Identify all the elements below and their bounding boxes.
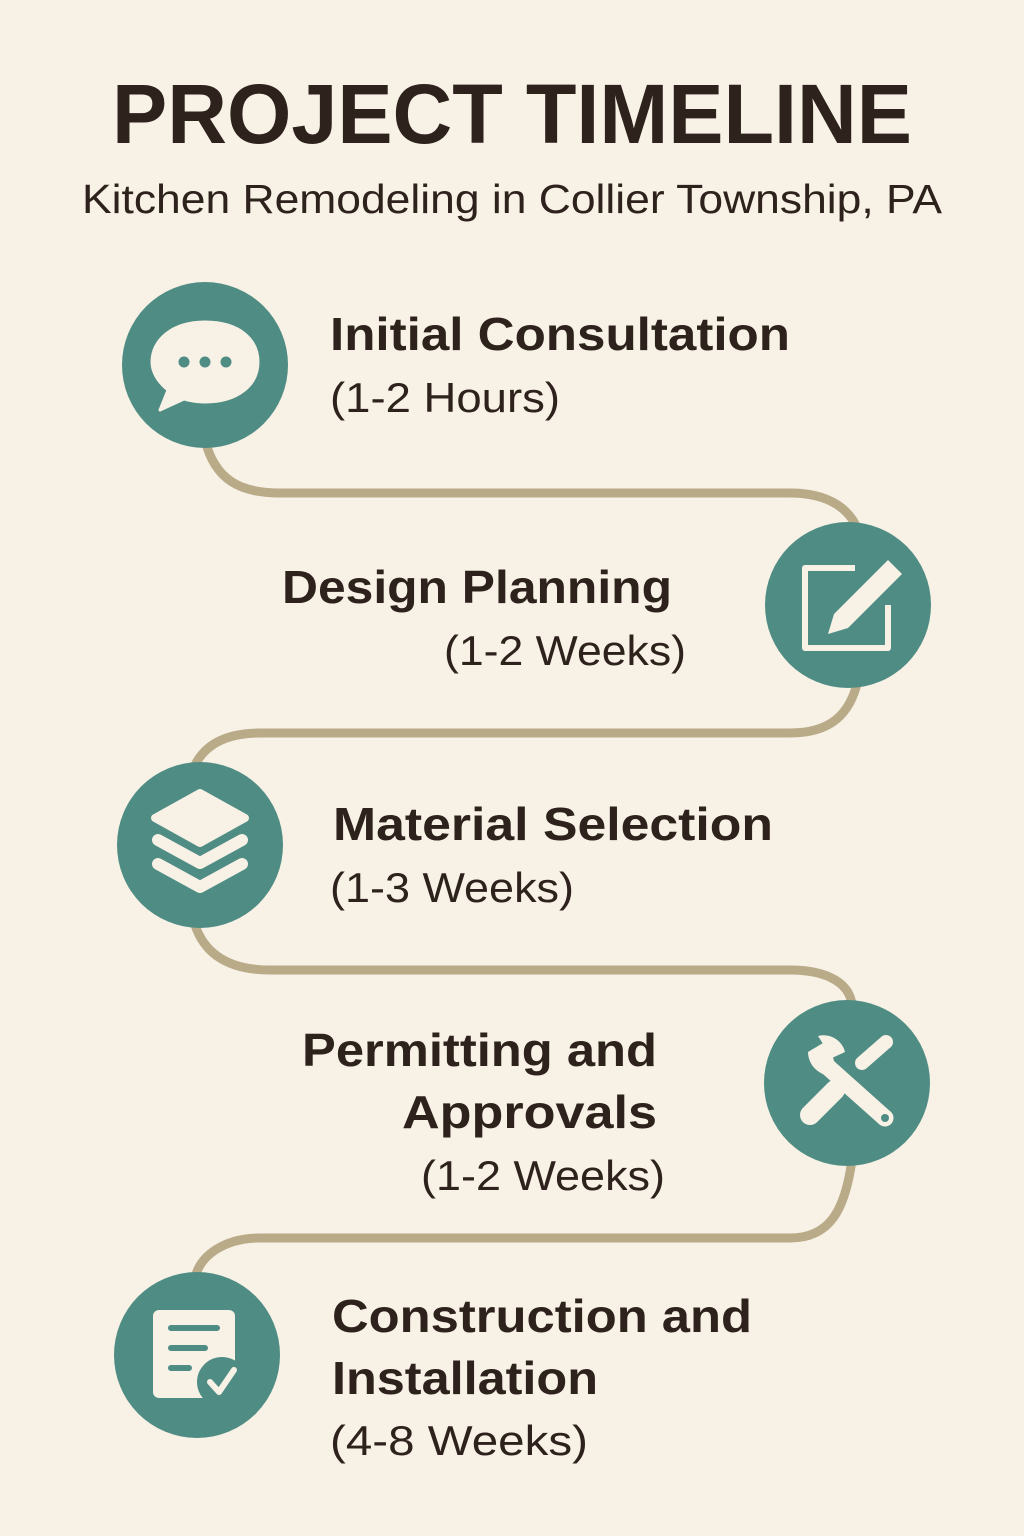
step 1: initial consultation: Initial Consultation — [330, 308, 790, 360]
icon: layers — [117, 762, 283, 928]
step 3: material selection: (1-3 Weeks) — [330, 864, 574, 911]
step 1: initial consultation — [122, 282, 790, 448]
icon: checklist document — [114, 1272, 280, 1438]
step 4: permitting and approvals: Approvals — [402, 1086, 657, 1138]
step 3: material selection — [117, 762, 773, 928]
step 2: design planning: (1-2 Weeks) — [444, 627, 686, 674]
step 5: construction and installation: Installation — [332, 1352, 598, 1404]
subtitle: Kitchen Remodeling in Collier Township, PA — [82, 176, 943, 222]
step 4: permitting and approvals: (1-2 Weeks) — [421, 1152, 665, 1199]
step 3: material selection: Material Selection — [333, 798, 773, 850]
step 4: permitting and approvals: Permitting and — [302, 1024, 657, 1076]
step 4: permitting and approvals — [302, 1000, 930, 1199]
step 5: construction and installation — [114, 1272, 752, 1464]
title: PROJECT TIMELINE — [112, 67, 912, 161]
step 5: construction and installation: Construction and — [332, 1290, 752, 1342]
icon: edit pencil — [765, 522, 931, 688]
icon: wrench and screwdriver — [764, 1000, 930, 1166]
icon: chat bubble — [122, 282, 288, 448]
step 2: design planning: Design Planning — [282, 561, 672, 613]
timeline path — [195, 440, 858, 1278]
step 1: initial consultation: (1-2 Hours) — [330, 374, 560, 421]
step 5: construction and installation: (4-8 Weeks) — [330, 1417, 588, 1464]
step 2: design planning — [282, 522, 931, 688]
